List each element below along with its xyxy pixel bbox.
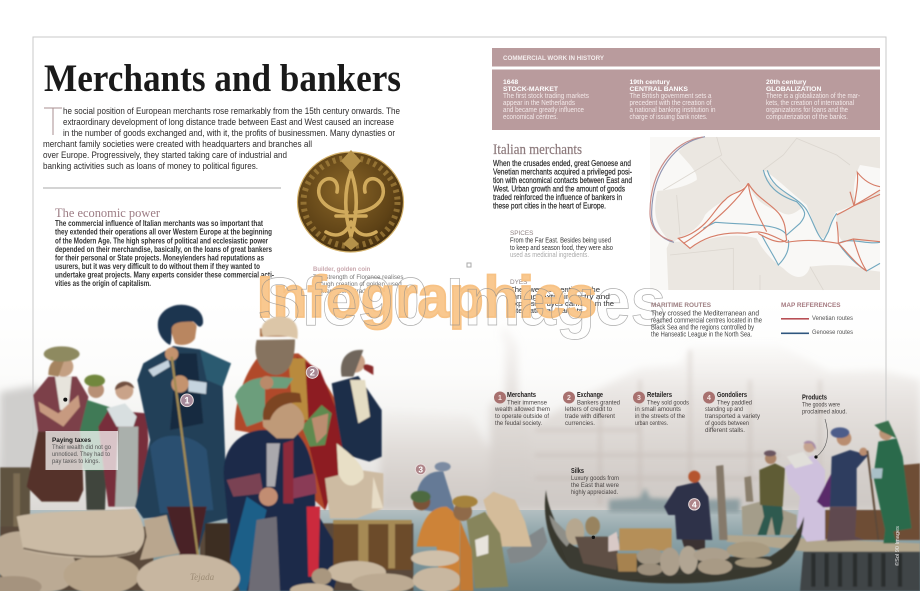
small figure [757,450,785,535]
header bar [492,48,880,66]
watermark: Infographies [257,265,597,330]
intro text: extraordinary development of long distance trade between East and West caused an increase [63,116,394,127]
column: 20th century globalization: 20th century [766,79,807,86]
man paying taxes [27,346,88,502]
panel: the economic power: for their personal or State projects. Moneylenders had reputations as [55,253,264,262]
illustration: left group of merchants [0,305,461,591]
callout: silks: highly appreciated. [571,489,618,496]
legend 2: exchange: Exchange [577,392,603,399]
callout: paying taxes: Their wealth did not go [52,444,111,451]
text block: dyes [510,279,614,315]
legend 2: exchange: trade with different [565,413,615,420]
intro text: in the number of goods exchanged and, with it, the profits of businessmen. Many dynasties or [63,127,395,138]
column: 1648 stock-market: and became greatly influence [503,107,584,114]
legend 1: merchants [494,392,550,427]
man in blue with purple cape [817,427,868,542]
column: 1648 stock-market [503,79,589,121]
cream-robed worker [483,492,532,547]
orange worker [411,491,460,591]
marker dot [63,398,67,402]
text block: maritime routes: Black Sea and the regions controlled by [651,322,754,332]
legend 4: gondoliers: 4 [707,395,711,402]
legend 1: merchants: 1 [498,395,502,402]
legend 2: exchange: 2 [567,395,571,402]
panel: the economic power: The commercial influence of Italian merchants was so important that [55,219,263,228]
legend 2: exchange [563,392,620,427]
column: 19th century central banks: a national banking institution in [630,107,716,114]
column: 19th century central banks: CENTRAL BANKS [630,86,688,93]
text block: spices: to keep and season food, they were also [510,243,613,252]
legend 1: merchants: to operate outside of [495,413,549,420]
badge 2 [306,366,318,378]
illustration: gondola and dock [452,421,920,591]
legend 3: retailers: 3 [637,395,641,402]
column: 19th century central banks [630,79,716,121]
panel: commercial work in history [492,48,880,130]
copyright: ©Sol 90 Images [894,526,901,566]
text block: dyes: expensive dyes came from the [510,299,614,308]
marker dot [592,536,595,539]
text block: maritime routes: They crossed the Mediterranean and [651,308,759,318]
column: 19th century central banks: The British government sets a [630,93,712,100]
panel: italian merchants: these port cities in the heart of Europe. [493,202,606,210]
panel: italian merchants: West. Urban growth and the amount of goods [493,184,625,194]
legend: genoese routes: Genoese routes [812,329,854,336]
text block: spices [510,230,613,259]
map: mediterranean trade routes [650,137,880,290]
callout: silks: Luxury goods from [571,475,619,482]
heading: The economic power [55,205,161,220]
boatman [664,471,712,550]
distant gondola [507,527,547,563]
panel: the economic power: depended on their merchandise, basically, on the loans of great bankers [55,245,272,254]
genoese routes [652,137,880,271]
panel: commercial work in history: COMMERCIAL WORK IN HISTORY [503,55,604,62]
woman in dotted dress [98,382,148,507]
column: 20th century globalization: kets, the creation of international [766,100,854,107]
callout: paying taxes [46,431,118,470]
legend 4: gondoliers: They paddled [717,400,752,406]
legend 3: retailers: They sold goods [647,400,690,406]
legend 4: gondoliers [703,392,761,434]
text block: dyes: They were essential to the [510,285,600,294]
badge 2: 2 [310,368,315,378]
text block: maritime routes: the Hanseatic League in the North Sea. [651,330,752,338]
badge 4 [689,499,700,510]
legend 4: gondoliers: different stalls. [705,427,745,434]
text block: maritime routes [651,302,762,338]
dark ground [0,523,413,591]
legend 1: merchants: the feudal society. [495,420,542,427]
column: 19th century central banks: 19th century [630,79,670,86]
venetian routes [650,137,880,271]
legend: venetian routes: Venetian routes [812,315,854,322]
map references legend [781,302,854,336]
boy in green [80,375,113,510]
woman in lilac [785,441,825,542]
panel: the economic power [55,205,274,288]
text block: spices: From the Far East. Besides being used [510,236,611,244]
intro text: banking activities such as loans of money to political figures. [43,160,258,171]
blue-capped worker [417,471,457,515]
text block: maritime routes: reached commercial centres located in the [651,316,762,324]
map references legend: MAP REFERENCES [781,302,841,309]
text block: maritime routes: MARITIME ROUTES [651,302,712,309]
column: 20th century globalization: organizations for loans and the [766,107,848,114]
legend 1: merchants: Merchants [507,392,536,399]
left crate wall [0,467,30,533]
gondola hull [545,471,804,583]
panel: italian merchants: tion with economical contacts between East and [493,176,632,185]
intro text: over Europe. Progressively, they started taking care of industrial and [43,149,287,160]
panel: the economic power: undertake great projects. Many experts consider these commercial acti- [55,270,274,280]
badge 3: 3 [418,464,423,474]
callout: products: Products [802,394,827,402]
coin caption: in international trade. [313,288,371,295]
near crates [333,521,412,570]
young man in navy vest [325,350,383,518]
callout: paying taxes: pay taxes to kings. [52,458,100,465]
text block: dyes: thriving textile industry and [510,292,610,301]
gondola cargo [566,517,772,576]
badge 1 [181,394,193,407]
title: Merchants and bankers [44,57,401,100]
legend 2: exchange: currencies. [565,420,595,427]
icon: golden florin coin [298,150,404,252]
column: 1648 stock-market: appear in the Netherlands [503,100,575,107]
stone pile [742,502,797,535]
watermark: Sfe90 Images [258,264,666,340]
legend 3: retailers [633,392,690,427]
legend 4: gondoliers: of goods between [705,420,749,427]
badge 1: 1 [184,396,190,406]
heading: Italian merchants [493,142,582,158]
signature: Tejada [190,572,215,582]
panel: italian merchants [493,142,632,210]
coin caption [313,267,403,295]
grain sacks left [0,508,240,591]
merchant with staff [135,305,231,558]
callout: paying taxes: Paying taxes [52,437,92,444]
panel: italian merchants: When the crusades ended, great Genoese and [493,159,631,168]
column: 1648 stock-market: 1648 [503,79,518,86]
seated merchant [224,392,343,591]
column: 20th century globalization [766,79,861,121]
text block: dyes: DYES [510,279,527,286]
page frame [33,37,886,480]
callout: silks: the East that were [571,482,619,489]
legend 3: retailers: in small amounts [635,406,682,413]
badge 4: 4 [692,500,697,510]
background scene: Venetian haze [0,300,920,591]
column: 1648 stock-market: The first stock trading markets [503,93,589,100]
legend 2: exchange: letters of credit to [565,406,612,413]
column: 20th century globalization: computerization of the banks. [766,114,848,121]
green-robed worker [452,496,508,591]
panel: the economic power: usurers, but it was very difficult to do without them if they wanted to [55,262,260,271]
legend 1: merchants: Their immense [507,400,547,406]
coin caption: Builder, golden coin [313,267,371,273]
text block: spices: SPICES [510,230,533,237]
panel: the economic power: vities as the origin of capitalism. [55,279,151,288]
legend 4: gondoliers: Gondoliers [717,392,747,399]
text block: spices: used as medicinal ingredients. [510,250,589,259]
column: 19th century central banks: charge of issuing bank notes. [630,114,708,121]
column: 1648 stock-market: economical centres. [503,114,558,121]
column: 19th century central banks: precedent with the creation of [630,100,712,107]
dock wall [823,463,920,540]
man in green [867,421,912,543]
column: 20th century globalization: There is a globalization of the mar- [766,93,861,100]
coin caption: through creation of golden, used [313,281,402,288]
callout: silks: Silks [571,468,584,475]
coin caption: The strength of Florence realises [313,274,403,281]
legend 3: retailers: in the streets of the [635,413,685,420]
mooring posts [716,465,728,540]
legend 3: retailers: urban centres. [635,420,668,427]
callout: products: proclaimed aloud. [802,408,847,416]
grain sacks centre [290,550,461,591]
column: 20th century globalization: GLOBALIZATION [766,86,821,93]
panel: the economic power: of the Modern Age. The high spheres of political and ecclesiastic power [55,236,268,245]
turbaned banker [235,317,343,510]
legend 1: merchants: wealth allowed them [494,406,550,413]
legend 4: gondoliers: standing up and [705,406,743,413]
callout: silks [571,468,619,496]
column: 1648 stock-market: STOCK-MARKET [503,86,559,93]
drop cap T [44,108,62,135]
legend 3: retailers: Retailers [647,392,672,399]
panel: the economic power: they extended their operations all over Western Europe at the beginning [55,228,272,237]
text block: dyes: international markets. [510,306,585,315]
panel: italian merchants: traded reinforced the influence of bankers in [493,193,622,202]
legend 4: gondoliers: transported a variety [705,413,761,420]
intro text: merchant family societies were created with headquarters and branches all [43,138,312,149]
panel: italian merchants: Venetian merchants acquired a privileged posi- [493,168,632,176]
intro text: he social position of European merchants rose remarkably from the 15th century onwards. The [63,105,400,116]
callout: products: The goods were [802,402,840,408]
sea [673,165,880,277]
callout: products [802,394,847,459]
badge 3 [415,464,426,475]
intro text [43,105,400,171]
legend 2: exchange: Bankers granted [577,400,620,406]
callout: paying taxes: unnoticed. They had to [52,451,110,458]
